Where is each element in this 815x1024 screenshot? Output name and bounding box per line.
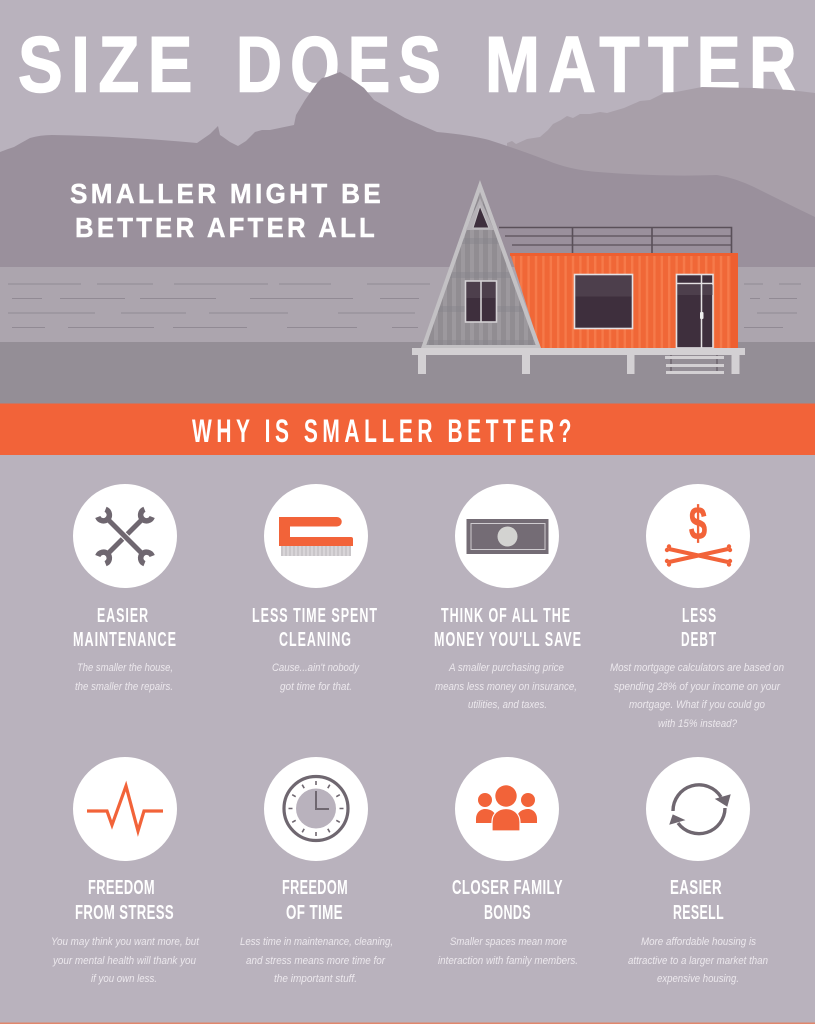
text: You may think you want more, but (51, 936, 200, 948)
text (435, 662, 577, 711)
back mountain (507, 87, 815, 300)
title: SIZE (18, 20, 201, 108)
icon: dollar and crossbones: $ (689, 497, 707, 549)
heading: OF TIME (286, 901, 343, 924)
heading: BONDS (484, 901, 531, 924)
band heading: WHY IS SMALLER BETTER? (192, 413, 576, 449)
text: A smaller purchasing price (448, 662, 564, 674)
container window (574, 274, 632, 328)
text: with 15% instead? (658, 718, 738, 730)
heading (670, 876, 724, 924)
heading: LESS (682, 604, 717, 627)
heading: MAINTENANCE (73, 628, 177, 651)
text: attractive to a larger market than (628, 955, 768, 967)
text (51, 936, 200, 985)
icon: brush (264, 484, 368, 588)
item: closer family bonds (438, 757, 578, 967)
text: Less time in maintenance, cleaning, (240, 936, 393, 948)
heading: CLOSER FAMILY (452, 876, 563, 899)
subtitle: BETTER AFTER ALL (75, 212, 378, 243)
item: easier maintenance (73, 484, 177, 693)
item: money (434, 484, 582, 711)
orange band (0, 404, 815, 455)
text (438, 936, 578, 967)
text: Cause...ain't nobody (272, 662, 360, 674)
icon: refresh arrows (646, 757, 750, 861)
heading (681, 604, 717, 651)
lake (0, 267, 815, 342)
text (272, 662, 360, 693)
door (676, 274, 713, 348)
heading: EASIER (97, 604, 149, 627)
item: less time cleaning (252, 484, 378, 693)
text: means less money on insurance, (435, 681, 577, 693)
a-frame window (466, 281, 496, 322)
text: if you own less. (91, 973, 157, 985)
heading: LESS TIME SPENT (252, 604, 378, 627)
ground (0, 342, 815, 404)
text (610, 662, 784, 730)
platform and legs (412, 348, 745, 374)
heading: CLEANING (279, 628, 352, 651)
icon: banknote (455, 484, 559, 588)
item: easier resell (628, 757, 768, 985)
heading (282, 876, 348, 924)
title: DOES (236, 20, 449, 108)
a-frame (424, 186, 538, 347)
title (18, 20, 805, 108)
text: the important stuff. (274, 973, 357, 985)
heading (434, 604, 582, 651)
text: Most mortgage calculators are based on (610, 662, 784, 674)
heading (73, 604, 177, 651)
item: less debt (610, 484, 784, 730)
subtitle: SMALLER MIGHT BE (70, 178, 384, 209)
heading (252, 604, 378, 651)
icon: family (455, 757, 559, 861)
text: the smaller the repairs. (75, 681, 173, 693)
footer line (0, 1022, 815, 1024)
steps (665, 355, 724, 374)
text: interaction with family members. (438, 955, 578, 967)
heading: FREEDOM (282, 876, 348, 899)
heading: RESELL (673, 901, 724, 924)
item: freedom from stress (51, 757, 200, 985)
railing (499, 228, 732, 253)
text: got time for that. (280, 681, 352, 693)
text (240, 936, 393, 985)
text: utilities, and taxes. (468, 699, 547, 711)
heading: EASIER (670, 876, 722, 899)
heading: FREEDOM (88, 876, 155, 899)
heading (452, 876, 563, 924)
text: Smaller spaces mean more (450, 936, 567, 948)
heading: THINK OF ALL THE (441, 604, 571, 627)
subtitle (70, 178, 384, 243)
item: freedom of time (240, 757, 393, 985)
icon: dollar and crossbones (646, 484, 750, 588)
heading (75, 876, 174, 924)
front mountain (0, 72, 815, 300)
container (510, 253, 738, 348)
icon: clock (264, 757, 368, 861)
text: your mental health will thank you (52, 955, 196, 967)
text: The smaller the house, (77, 662, 173, 674)
text: and stress means more time for (246, 955, 386, 967)
heading: MONEY YOU'LL SAVE (434, 628, 582, 651)
text: spending 28% of your income on your (614, 681, 781, 693)
icon: wrenches (73, 484, 177, 588)
icon: pulse (73, 757, 177, 861)
heading: DEBT (681, 628, 717, 651)
text: mortgage. What if you could go (629, 699, 765, 711)
house (412, 186, 745, 374)
text (75, 662, 173, 693)
text: expensive housing. (657, 973, 739, 985)
heading: FROM STRESS (75, 901, 174, 924)
text: More affordable housing is (641, 936, 756, 948)
text (628, 936, 768, 985)
